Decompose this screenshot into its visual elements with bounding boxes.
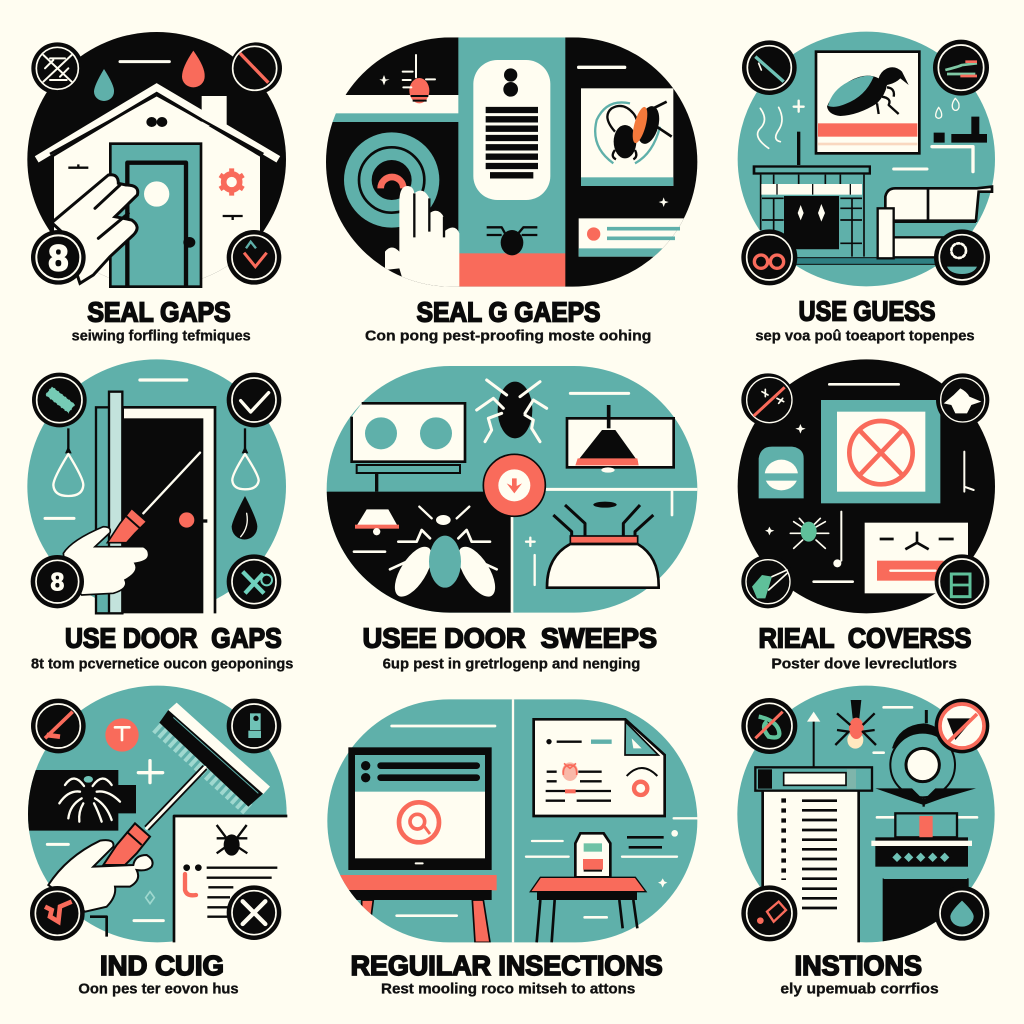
badge: slash: [742, 40, 797, 95]
icon: dome device: [875, 710, 976, 807]
badge: infinity: [741, 229, 797, 285]
icon: hand: [48, 840, 153, 912]
icon: laptop: [348, 747, 492, 870]
badge: check: [227, 230, 281, 285]
badge: coral tool: [31, 699, 86, 753]
badge: prohibited: [230, 42, 282, 94]
icon: hanging loop left: [53, 428, 83, 496]
icon: black bug with legs: [477, 380, 547, 442]
caption: regular insections: Rest mooling roco mitseh to attons: [381, 981, 635, 997]
badge: cream shape: [936, 373, 989, 427]
badge: teal clip: [741, 555, 795, 608]
heading: seal g gaeps: SEAL G GAEPS: [417, 297, 600, 328]
icon: coral T: [105, 718, 139, 752]
icon: coral bug: [379, 55, 435, 103]
panel: fireplace room: [738, 32, 995, 286]
panel: door with tool: [20, 350, 293, 617]
badge: x mark: [227, 885, 281, 940]
badge: slashed link: [741, 698, 797, 754]
panel: real covers: [738, 359, 995, 613]
badge: tools: [227, 554, 281, 609]
icon: paper sheet: [174, 816, 287, 942]
badge: slashed bugs: [741, 373, 795, 427]
icon: door: [110, 144, 201, 287]
badge: ruler: [32, 373, 87, 427]
badge: web: [31, 42, 83, 94]
caption: ind cuig: Oon pes ter eovon hus: [78, 981, 239, 997]
heading: use door gaps: USE DOOR GAPS: [65, 622, 282, 653]
heading: rieal coverss: RIEAL COVERSS: [759, 622, 971, 653]
icon: arrow: [807, 712, 820, 768]
panel: instions: [732, 683, 999, 947]
icon: door frame: [96, 392, 215, 613]
heading: regular insections: REGUILAR INSECTIONS: [351, 950, 663, 981]
panel: door sweeps: [325, 363, 698, 615]
vent grille: [473, 60, 550, 200]
badge: water drop: [935, 886, 989, 941]
icon: teal drop: [94, 69, 114, 101]
caption: instions: ely upemuab corrfios: [780, 981, 939, 997]
heading: use guess: USE GUESS: [799, 296, 935, 327]
icon: document: [534, 719, 665, 816]
list lines: [784, 798, 837, 908]
caption: use door gaps: 8t tom pcvernetice oucon geoponings: [31, 656, 293, 672]
badge: number eight: 8: [48, 238, 68, 279]
badge: teal frame: [935, 554, 989, 609]
heading: ind cuig: IND CUIG: [100, 950, 224, 981]
icon: green spider: [790, 518, 829, 548]
badge: dots bowl: [934, 229, 990, 285]
badge: colored mark: [933, 40, 989, 96]
badge: check mark: [227, 373, 281, 427]
panel: regular inspections: [325, 697, 698, 947]
icon: coral spider: [835, 700, 876, 749]
icon: billboard: [352, 403, 465, 492]
icon: base unit: [871, 813, 972, 879]
scroll bar top: [755, 767, 872, 791]
icon: black drop: [232, 496, 257, 540]
icon: teal jar: [759, 447, 804, 498]
note: spider and lines: [183, 825, 277, 917]
icon: spider: [487, 227, 537, 255]
icon: fly: [388, 507, 502, 602]
badge: coral center: [483, 454, 545, 516]
icon: paper list: [763, 790, 859, 942]
icon: screwdriver: [107, 453, 200, 543]
picture: fly: [816, 52, 919, 153]
icon: small table: [530, 877, 646, 942]
badge: number eight: [31, 230, 86, 285]
icon: finger lines of pointing hand: [414, 193, 444, 237]
heading: instions: INSTIONS: [795, 950, 922, 981]
badge: eight: 8: [50, 570, 64, 597]
card: beetle picture: [581, 88, 673, 186]
caption: seal g gaeps: Con pong pest-proofing moste oohing: [365, 329, 651, 345]
badge: clip: [227, 699, 281, 753]
icon: fireplace: [753, 132, 950, 264]
badge: coral clip: [741, 885, 797, 941]
icon: sofa: [878, 187, 992, 258]
icon: pot with antennae: [547, 502, 659, 588]
heading: seal gaps: SEAL GAPS: [87, 297, 231, 328]
caption: seal gaps: seiwing forfling tefmiques: [72, 329, 251, 345]
icon: spider on black: [59, 776, 120, 822]
caption: use guess: sep voa poû toeaport topenpes: [755, 329, 975, 345]
badge: coral mark: [30, 886, 85, 941]
badge: eight: [31, 555, 84, 608]
icon: coral drop: [182, 51, 205, 87]
heading: usee door sweeps: USEE DOOR SWEEPS: [363, 622, 657, 653]
icon: table: [333, 875, 497, 942]
icon: coral gear: [220, 168, 243, 196]
icon: hand: [63, 527, 149, 595]
caption: rieal coverss: Poster dove levreclutlors: [771, 656, 957, 672]
poster: prohibition sign: [821, 400, 940, 503]
icon: hand on door: [52, 175, 138, 283]
panel: vent and bugs: [326, 37, 699, 289]
panel: brush and pest note: [20, 680, 293, 947]
icon: small lamp: [354, 509, 399, 552]
icon: hanging loop right: [232, 428, 259, 489]
caption: usee door sweeps: 6up pest in gretrlogenp and nenging: [383, 656, 640, 672]
icon: hanging lamp: [567, 405, 674, 473]
badge: coral prohibited: [935, 699, 989, 753]
icon: bottle: [575, 833, 610, 877]
panel: seal gaps house: [20, 27, 293, 293]
card: face note: [865, 523, 968, 593]
icon: brush: [103, 703, 270, 865]
card: text lines: [587, 227, 680, 241]
